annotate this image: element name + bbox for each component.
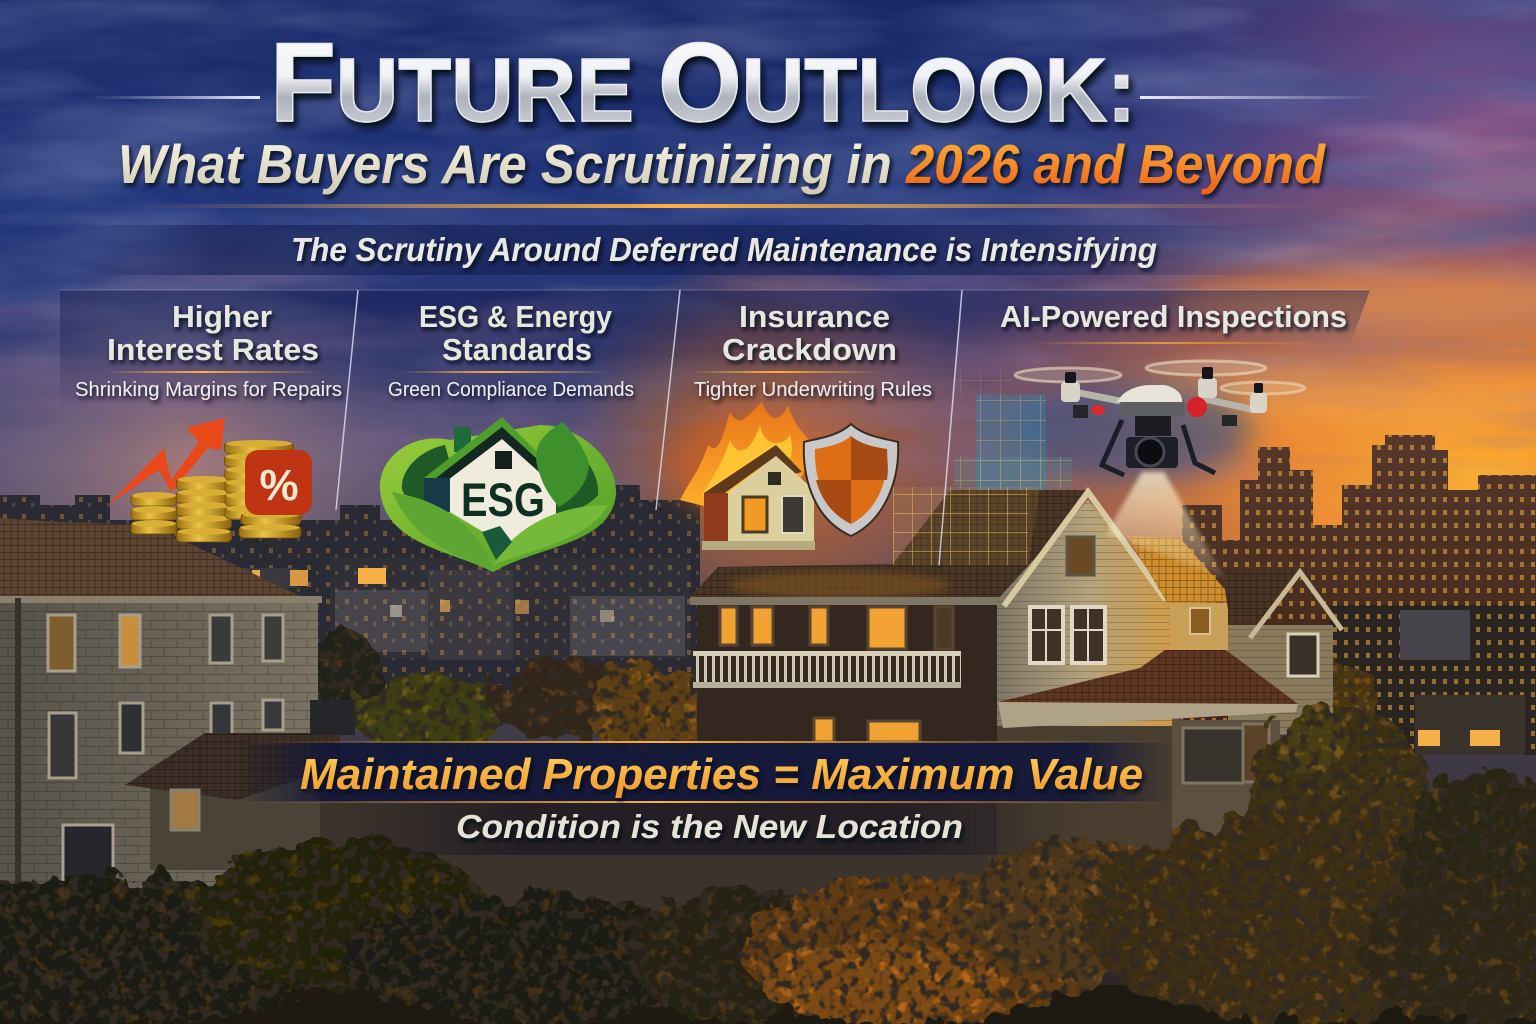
icon: rising arrow, coins and percent: [108, 418, 312, 542]
main roof: [690, 490, 1090, 600]
heading: Insurance Crackdown: Crackdown: [722, 332, 897, 367]
left building walls: [0, 598, 318, 888]
icon: insurance shield: [804, 424, 898, 536]
roof: [424, 417, 563, 478]
courtyard wall behind trees: [320, 800, 1180, 910]
gold divider: [140, 204, 1320, 208]
balcony railing: [693, 655, 961, 685]
caption: Shrinking Margins for Repairs: [75, 379, 342, 401]
golden lit roof section: [1127, 536, 1236, 604]
building: small house lower left: [125, 700, 355, 870]
panel: Higher Interest Rates: [60, 290, 358, 542]
title: FUTURE OUTLOOK:: [270, 20, 1136, 145]
lower leaves: [392, 492, 493, 572]
gable trim: [1004, 492, 1166, 606]
underline: [690, 371, 880, 373]
banner: maintained properties: [238, 741, 1173, 803]
lower storey wall: [997, 726, 1173, 860]
ESG letters: ESG: [461, 473, 545, 526]
panel: AI-Powered Inspections: [960, 290, 1370, 345]
tagline backing: [340, 803, 1080, 855]
heading: AI-Powered Inspections: AI-Powered Inspections: [1000, 299, 1347, 334]
lower porch roof: [998, 650, 1298, 726]
left building roof: [0, 518, 320, 605]
heading: ESG and Energy Standards: ESG & Energy: [419, 299, 613, 334]
heading: Higher Interest Rates: Interest Rates: [107, 332, 319, 367]
house body: [450, 436, 556, 548]
heading: Insurance Crackdown: Insurance: [739, 299, 890, 334]
icon: AI inspection grid overlay: [893, 370, 1072, 565]
underline: [105, 371, 320, 373]
title rules: [90, 96, 1380, 99]
underline: [400, 371, 610, 373]
building: main house under inspection: [690, 490, 1342, 860]
lower wing: [1172, 720, 1280, 840]
banner headline: Maintained Properties = Maximum Value: [300, 750, 1143, 799]
distant city skyline: right towers: [1182, 435, 1536, 755]
underline: [1030, 342, 1320, 344]
gable wall: [997, 500, 1175, 730]
percent symbol: %: [259, 461, 299, 510]
caption: Tighter Underwriting Rules: [694, 379, 932, 401]
column dividers: [60, 290, 1370, 565]
icon: drone scanning beam: [1106, 472, 1225, 578]
distant city skyline: left: [0, 485, 700, 700]
left building windows: [48, 615, 283, 889]
ground shade beneath foreground trees: [0, 985, 1536, 1024]
section heading: The Scrutiny Around Deferred Maintenance is Intensifying: [291, 231, 1157, 268]
porch wall: [697, 602, 997, 742]
right wing: [1228, 625, 1333, 735]
panel: ESG and Energy Standards: [347, 290, 680, 572]
subtitle: What Buyers Are Scrutinizing in 2026 and Beyond: [118, 133, 1326, 195]
foreground trees: [0, 705, 1536, 1024]
building: left stone apartment house: [0, 518, 322, 889]
panel: Insurance Crackdown: [668, 290, 962, 550]
caption: Green Compliance Demands: [388, 379, 634, 401]
lit porch windows: [720, 607, 953, 742]
section band backing: [60, 225, 1300, 275]
right leaf: [536, 422, 589, 507]
outer leaf wreath: [380, 425, 616, 572]
dormer: [1170, 603, 1228, 651]
mid-ground apartment blocks: [238, 558, 690, 660]
icon: inspection drone: [1015, 361, 1305, 475]
heading: Higher Interest Rates: Higher: [172, 299, 272, 334]
chimney: [454, 427, 471, 452]
tagline: Condition is the New Location: [456, 808, 963, 845]
heading: ESG and Energy Standards: Standards: [442, 332, 592, 367]
gable windows: [1067, 537, 1094, 575]
icon: ESG house in leaves: [380, 417, 616, 572]
mid-ground trees: [311, 630, 1380, 755]
icon: burning house: [668, 402, 815, 550]
